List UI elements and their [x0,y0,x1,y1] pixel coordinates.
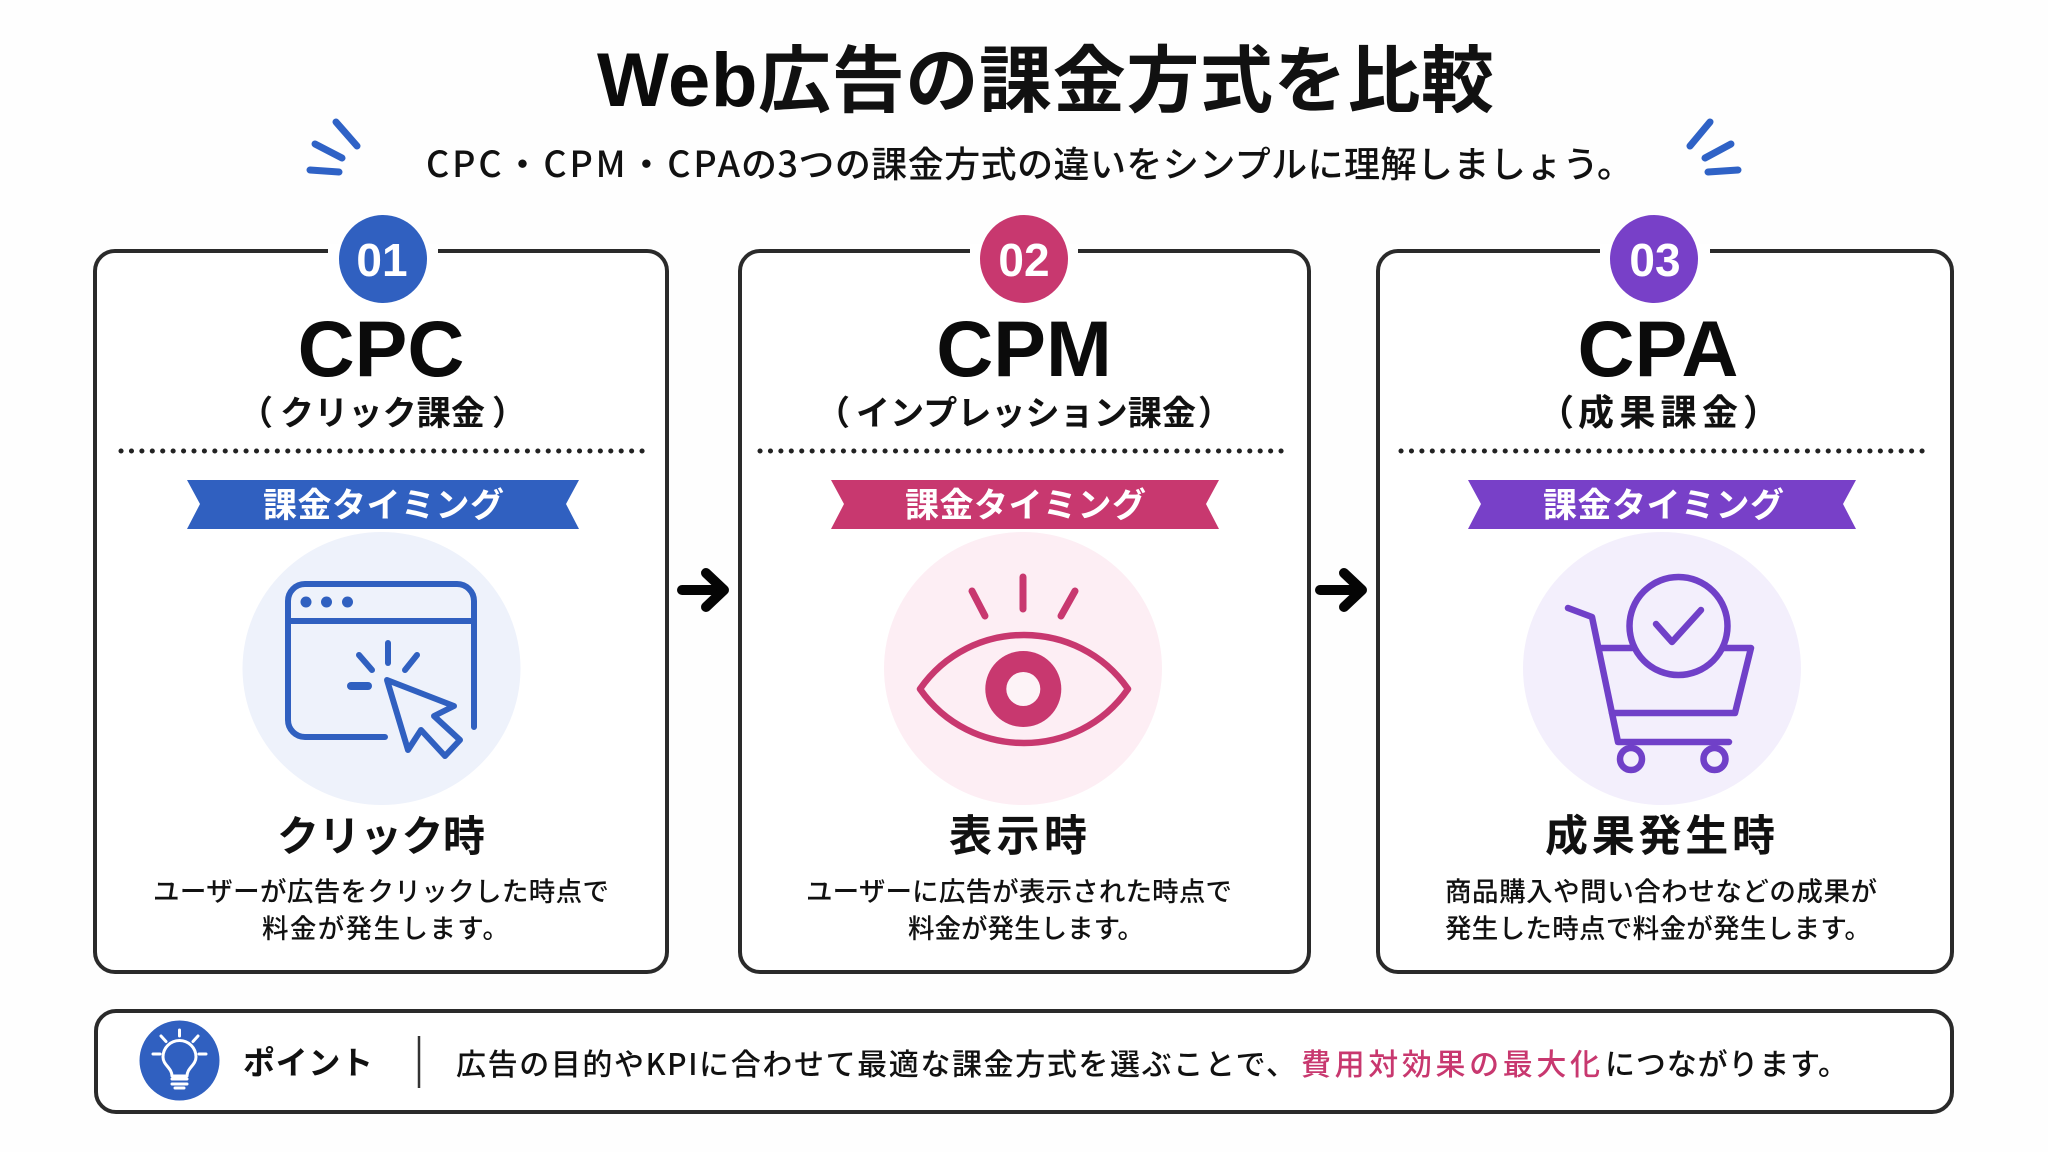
description: 発生した時点で料金が発生します。 [1445,907,1871,946]
badge 01: 01 [356,234,408,286]
arrow 2 [1320,573,1362,607]
ribbon: 課金タイミング [263,478,504,527]
timing heading: 表示時 [949,802,1087,864]
subheading: ） [492,386,526,435]
icon: browser click [242,532,520,805]
icon: eye [884,532,1162,805]
title: Web広告の課金方式を比較 [597,22,1494,128]
subheading: （ [816,386,850,435]
icon: left sparkle [310,122,357,172]
heading CPA: CPA [1578,304,1738,393]
subheading: ） [1198,386,1232,435]
description: ユーザーに広告が表示された時点で [806,870,1232,909]
ribbon: 課金タイミング [1543,478,1784,527]
ribbon [1468,478,1856,529]
description [1445,870,1877,946]
heading CPC: CPC [298,304,464,393]
subtitle: CPC・CPM・CPA [426,136,741,188]
subheading: ） [1743,384,1779,436]
heading CPM: CPM [936,304,1112,393]
point label: ポイント [243,1038,373,1084]
description [153,870,609,946]
ribbon [831,478,1219,529]
subheading: 成果課金 [1578,384,1738,436]
message: につながります。 [1605,1040,1848,1084]
panel: CPA [1378,215,1952,972]
timing heading: クリック時 [277,803,485,864]
timing heading: 成果発生時 [1545,802,1775,864]
description [806,870,1232,946]
badge 03 [1610,215,1698,303]
badge 02: 02 [998,234,1050,286]
message [456,1040,1848,1084]
panel: CPM [740,215,1309,972]
description: 商品購入や問い合わせなどの成果が [1445,870,1877,909]
subheading: （ [239,386,273,435]
description: 料金が発生します。 [262,907,509,946]
arrow 1 [682,573,724,607]
panel: point [96,1011,1952,1112]
panel: CPC [95,215,667,972]
icon: right sparkle [1690,122,1738,172]
subheading [1538,384,1779,436]
icon: cart with check [1523,532,1801,805]
subtitle: の3つの課金方式の違いをシンプルに理解しましょう。 [741,136,1633,188]
ribbon [187,478,579,529]
badge 01 [339,215,427,303]
subheading: クリック課金 [280,386,485,435]
icon: light bulb [140,1020,220,1100]
subheading: インプレッション課金 [856,386,1196,435]
description: ユーザーが広告をクリックした時点で [153,870,609,909]
badge 03: 03 [1629,234,1681,286]
description: 料金が発生します。 [908,907,1144,946]
subheading: （ [1538,384,1574,436]
badge 02 [980,215,1068,303]
message: 広告の目的やKPIに合わせて最適な課金方式を選ぶことで、 [456,1040,1296,1084]
ribbon: 課金タイミング [905,478,1146,527]
message: 費用対効果の最大化 [1301,1040,1600,1084]
